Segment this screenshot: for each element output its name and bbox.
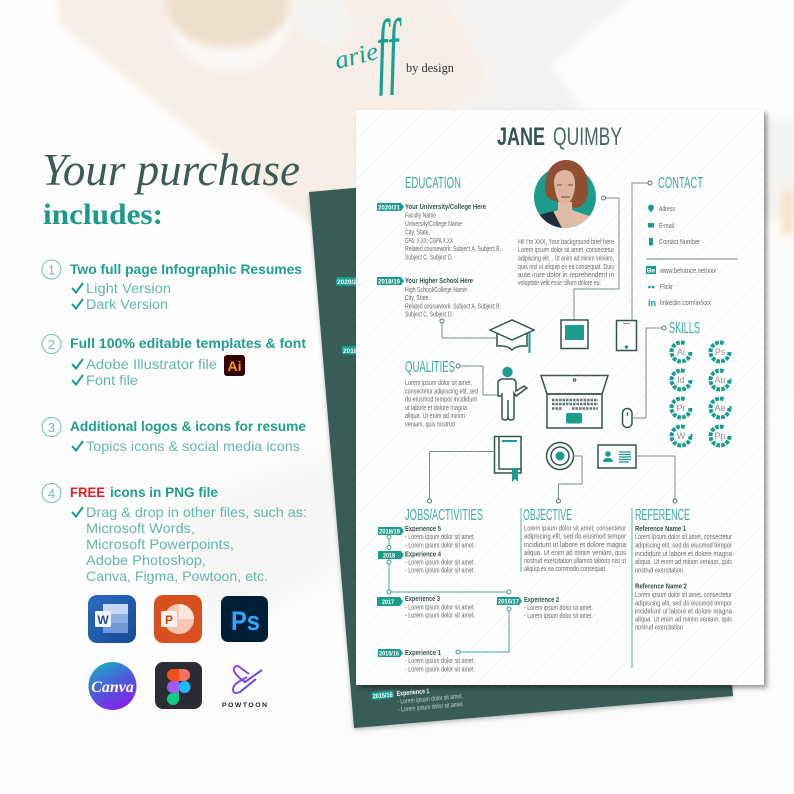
- experience 5: [378, 526, 475, 550]
- icon: Figma: [155, 662, 202, 709]
- tag 2018/19: 2018/19: [378, 278, 400, 286]
- logo: arieff by design: arie: [332, 38, 381, 75]
- experience 4: - Lorem ipsum dolor sit amet.: [405, 560, 475, 566]
- panel: objective: aliquip ex ea commodo consequat: [524, 566, 605, 573]
- panel: reference: Lorem ipsum dolor sit amet, consectetur: [635, 592, 733, 599]
- icon: Microsoft Word: [88, 595, 136, 643]
- icon: Canva: [88, 662, 136, 710]
- dark page experience 1: - Lorem ipsum dolor sit amet.: [397, 693, 463, 706]
- panel: contact: linkedin.com/in/xxx: [660, 300, 711, 307]
- intro text: Lorem ipsum dolor sit amet, consectetur: [518, 247, 615, 254]
- dark resume page behind: [309, 158, 733, 728]
- skill rings: Pr: [676, 403, 686, 413]
- experience 2: [497, 597, 593, 620]
- experience 4: - Lorem ipsum dolor sit amet.: [405, 568, 475, 574]
- dark page experience 1: [371, 684, 464, 716]
- item 4: free icons: FREE: [70, 484, 105, 500]
- icon: id card: [598, 445, 677, 503]
- icon: Microsoft PowerPoint: P: [165, 613, 173, 627]
- panel: qualities: ut labore et dolore magna: [405, 405, 467, 412]
- intro text: [518, 239, 615, 287]
- panel: reference: REFERENCE: [635, 507, 690, 524]
- intro text: adipiscing elit, . Ut enim ad minim veniam,: [518, 256, 614, 262]
- icon: phone outline: [616, 320, 636, 350]
- icon: monitor: [561, 320, 588, 348]
- panel: reference: [632, 507, 733, 668]
- panel: objective: adipiscing elit, sed do eiusmod tempor: [524, 534, 627, 541]
- panel: reference: Reference Name 2: [635, 584, 687, 590]
- panel: qualities: [405, 359, 497, 428]
- experience 3: - Lorem ipsum dolor sit amet.: [405, 604, 475, 612]
- icon: Powtoon: [222, 666, 267, 709]
- panel: objective: aliqua. Ut enim ad minim veniam, quis: [524, 550, 626, 557]
- panel: education: [377, 175, 501, 318]
- intro text: voluptate velit esse cillum dolore eu.: [518, 280, 601, 287]
- panel: education: Subject C, Subject D.: [405, 312, 453, 318]
- experience 1: [378, 649, 475, 674]
- panel: objective: incididunt ut labore et dolore magna: [524, 542, 626, 549]
- title: Your purchase includes: includes:: [43, 198, 163, 231]
- item 1: resumes: Two full page Infographic Resumes: [70, 261, 302, 277]
- panel: qualities: QUALITIES: [405, 359, 455, 376]
- experience 2: 2016/17: [498, 598, 519, 606]
- panel: reference: aliqua. Ut enim ad minim veniam, quis: [635, 616, 732, 624]
- item 3: logos and icons: [42, 418, 306, 454]
- experience 2: Experience 2: [524, 597, 559, 604]
- tag 2020/21: 2020/21: [378, 204, 400, 212]
- panel: reference: adipiscing elit, sed do eiusmod tempor: [635, 542, 733, 550]
- skill rings: Pp: [714, 431, 726, 441]
- panel: reference: nostrud exercitation: [635, 568, 683, 574]
- panel: jobs and activities timeline: JOBS/ACTIVITIES: [405, 507, 483, 524]
- icon: graduation cap: [440, 319, 534, 353]
- item 4: free icons: Microsoft Powerpoints,: [86, 536, 234, 552]
- panel: education: Your University/College Here: [405, 204, 486, 211]
- panel: qualities: consectetur adipiscing elit, sed: [405, 388, 478, 395]
- item 4: free icons: icons in PNG file: [110, 484, 218, 500]
- item 1: resumes: Dark Version: [86, 296, 168, 312]
- experience 4: 2018: [383, 552, 395, 560]
- item 3: logos and icons: 3: [48, 420, 55, 435]
- panel: qualities: veniam, quis nostrud: [405, 421, 455, 428]
- item 2: editable templates: [42, 334, 306, 388]
- dark page experience 1: Experience 1: [396, 688, 430, 698]
- panel: qualities: Lorem ipsum dolor sit amet,: [405, 380, 472, 387]
- logo: arieff by design: ff: [374, 3, 406, 97]
- name heading: [497, 123, 622, 151]
- item 1: resumes: Light Version: [86, 280, 171, 296]
- dark page tag 2018: 2018/19: [343, 348, 367, 355]
- title: Your purchase includes: [42, 145, 300, 231]
- title: Your purchase includes: Your purchase: [42, 145, 300, 195]
- panel: education: City, State.: [405, 295, 430, 302]
- panel: education: Related coursework: Subject A, Subject B,: [405, 246, 501, 253]
- panel: reference: aliqua. Ut enim ad minim veniam, quis: [635, 559, 732, 566]
- panel: objective: Lorem ipsum dolor sit amet, consectetur: [524, 526, 627, 532]
- panel: contact: Adress: [659, 206, 675, 213]
- intro text: aute irure dolor in reprehenderit in: [518, 272, 614, 279]
- panel: education: Your Higher School Here: [405, 278, 473, 285]
- panel: reference: incididunt ut labore et dolore magna: [635, 608, 732, 616]
- item 3: logos and icons: Additional logos & icons for resume: [70, 418, 306, 434]
- experience 1: 2015/16: [379, 650, 399, 658]
- intro text: quis nisl ut aliquip ex ea consequat. Duis: [518, 264, 614, 271]
- item 2: editable templates: 2: [48, 337, 55, 352]
- skill rings: W: [677, 431, 686, 441]
- experience 5: 2018/19: [379, 528, 400, 536]
- panel: contact: [646, 175, 738, 308]
- panel: jobs and activities timeline: [377, 507, 593, 674]
- light resume page: [356, 110, 764, 685]
- skill rings: Id: [677, 375, 685, 385]
- name heading: QUIMBY: [553, 123, 622, 151]
- icon: mouse and skills connector: [622, 326, 666, 428]
- panel: contact: Flickr: [660, 284, 674, 291]
- item 4: free icons: 4: [48, 486, 55, 501]
- logo: arieff by design: by design: [406, 61, 455, 75]
- panel: qualities: aliqua. Ut enim ad minim: [405, 413, 465, 420]
- icon: phone: [649, 238, 653, 246]
- skill rings: Ae: [714, 403, 726, 413]
- icon: envelope: [648, 223, 654, 228]
- experience 2: - Lorem ipsum dolor sit amet.: [524, 605, 593, 612]
- icon: flickr: [648, 286, 654, 288]
- experience 2: - Lorem ipsum dolor sit amet.: [524, 613, 593, 620]
- panel: reference: nostrud exercitation: [635, 624, 683, 632]
- icon: book: [428, 436, 521, 503]
- experience 1: - Lorem ipsum dolor sit amet.: [405, 658, 475, 665]
- icon: laptop: [541, 376, 608, 428]
- item 1: resumes: [42, 260, 302, 312]
- experience 3: - Lorem ipsum dolor sit amet.: [405, 612, 475, 620]
- item 2: editable templates: Full 100% editable templates & font: [70, 335, 306, 351]
- panel: contact: Contact Number: [659, 239, 701, 246]
- experience 5: - Lorem ipsum dolor sit amet.: [405, 534, 475, 541]
- dark page experience 1: 2015/16: [372, 692, 393, 700]
- experience 3: Experience 3: [405, 596, 440, 603]
- experience 3: 2017: [382, 599, 394, 606]
- logo: arieff by design: [332, 3, 455, 97]
- panel: contact: E-mail: [659, 223, 674, 230]
- timeline lines: [387, 535, 511, 654]
- portrait photo: [534, 160, 596, 232]
- item 4: free icons: Canva, Figma, Powtoon, etc.: [86, 568, 268, 584]
- item 2: editable templates: Font file: [86, 372, 138, 388]
- item 4: free icons: Drag & drop in other files, such as:: [86, 504, 307, 520]
- panel: skills: SKILLS: [669, 320, 700, 337]
- panel: objective: OBJECTIVE: [523, 507, 572, 524]
- panel: education: EDUCATION: [405, 175, 461, 192]
- icon: linkedin: in: [648, 298, 656, 308]
- panel: qualities: do eiusmod tempor incididunt: [405, 396, 477, 404]
- icon: Microsoft PowerPoint: [154, 595, 202, 643]
- icon: person: [498, 367, 527, 420]
- skill rings: Au: [714, 375, 726, 385]
- skill rings: Ai: [677, 347, 685, 357]
- panel: education: Faculty Name: [405, 212, 436, 220]
- icon: Adobe Photoshop: Ps: [231, 606, 260, 636]
- panel: education: High School/College Name: [405, 287, 467, 294]
- experience 1: Experience 1: [405, 650, 441, 657]
- experience 4: [378, 551, 475, 574]
- experience 1: - Lorem ipsum dolor sit amet.: [405, 666, 475, 674]
- panel: reference: adipiscing elit, sed do eiusmod tempor: [635, 600, 733, 608]
- panel: education: Subject C, Subject D.: [405, 254, 453, 262]
- icon: Canva: Canva: [91, 679, 134, 696]
- experience 5: Experience 5: [405, 526, 441, 533]
- panel: reference: Reference Name 1: [635, 526, 686, 533]
- panel: reference: Lorem ipsum dolor sit amet, consectetur: [635, 534, 733, 541]
- icon: Microsoft Word: W: [97, 613, 109, 627]
- panel: skills: [669, 320, 730, 446]
- icon: behance: Be: [647, 268, 656, 274]
- panel: education: University/College Name: [405, 221, 462, 228]
- item 4: free icons: [42, 484, 307, 584]
- item 4: free icons: Adobe Photoshop,: [86, 552, 206, 568]
- skill rings: Ps: [715, 347, 726, 357]
- connectors to portrait and contact: [574, 181, 652, 320]
- name heading: JANE: [497, 123, 545, 151]
- panel: objective: nostrud exercitation ullamco laboris nisi ut: [524, 558, 626, 565]
- panel: education: City, State.: [405, 230, 430, 236]
- icon: Powtoon: POWTOON: [222, 702, 267, 709]
- dark page experience 1: - Lorem ipsum dolor sit amet.: [398, 701, 464, 714]
- icon: Adobe Illustrator: Ai: [228, 358, 242, 374]
- panel: objective: [520, 507, 627, 573]
- experience 3: [377, 596, 475, 620]
- item 3: logos and icons: Topics icons & social media icons: [86, 438, 300, 454]
- icon: target: [546, 442, 582, 503]
- icon: Adobe Illustrator: [224, 355, 245, 376]
- item 2: editable templates: Adobe Illustrator file: [86, 356, 217, 372]
- intro text: Hi! I'm XXX, Your background brief here: [518, 239, 614, 246]
- dark page tag 2020/21: 2020/21: [337, 279, 361, 286]
- experience 4: Experience 4: [405, 552, 441, 558]
- item 1: resumes: 1: [48, 262, 55, 278]
- skill rings: [672, 342, 730, 446]
- panel: reference: incididunt ut labore et dolore magna: [635, 551, 732, 558]
- panel: education: GPA: X.XX; CGPA X.XX: [405, 238, 453, 245]
- icon: pin: [648, 204, 654, 212]
- panel: contact: www.behance.net/xxx: [659, 268, 716, 275]
- panel: education: Related coursework: Subject A, Subject B,: [405, 303, 501, 310]
- icon: Adobe Photoshop: [221, 596, 268, 642]
- item 4: free icons: Microsoft Words,: [86, 520, 195, 536]
- experience 5: - Lorem ipsum dolor sit amet.: [405, 542, 475, 550]
- panel: contact: CONTACT: [658, 175, 703, 192]
